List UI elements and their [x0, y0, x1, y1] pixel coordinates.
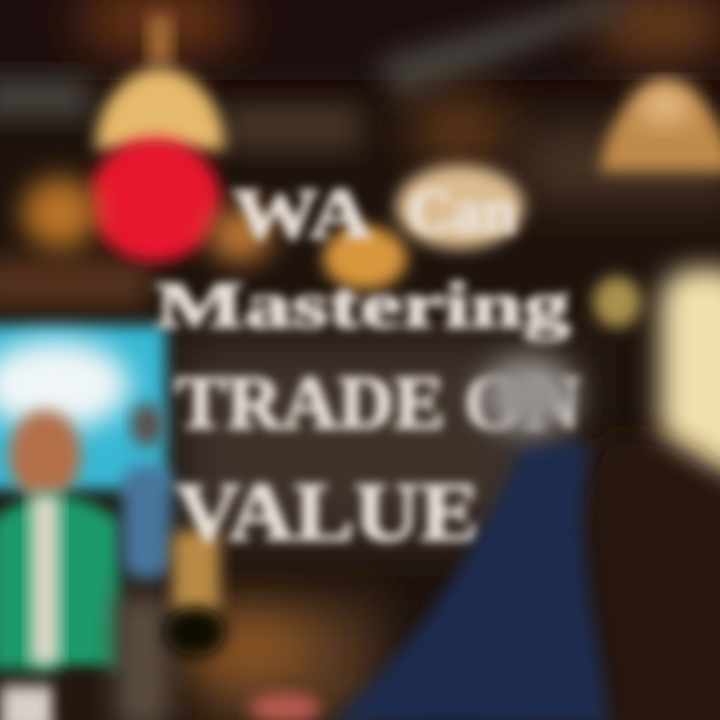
bright window right	[660, 268, 720, 483]
person in blue shirt	[115, 403, 172, 720]
title text: WA	[232, 174, 372, 254]
pendant lamp: centre right	[396, 165, 524, 249]
person in green jacket	[0, 410, 120, 720]
pendant lamp: centre	[323, 226, 407, 290]
title text	[155, 174, 580, 559]
title text: VALUE	[175, 466, 480, 559]
small glowing light	[593, 276, 641, 328]
red balloon	[89, 138, 221, 262]
bottle on table	[165, 530, 225, 656]
title text: TRADE ON	[175, 361, 580, 445]
man in navy jacket	[249, 357, 720, 720]
pendant lamp: left	[22, 177, 98, 249]
pendant lamp: small centre-left	[208, 207, 272, 263]
pendant lamp: gold dome	[95, 15, 225, 150]
pendant lamp: top right	[600, 80, 720, 172]
title text: Can	[408, 178, 516, 246]
title text: Mastering	[155, 269, 570, 342]
sky-blue screen	[0, 325, 166, 490]
